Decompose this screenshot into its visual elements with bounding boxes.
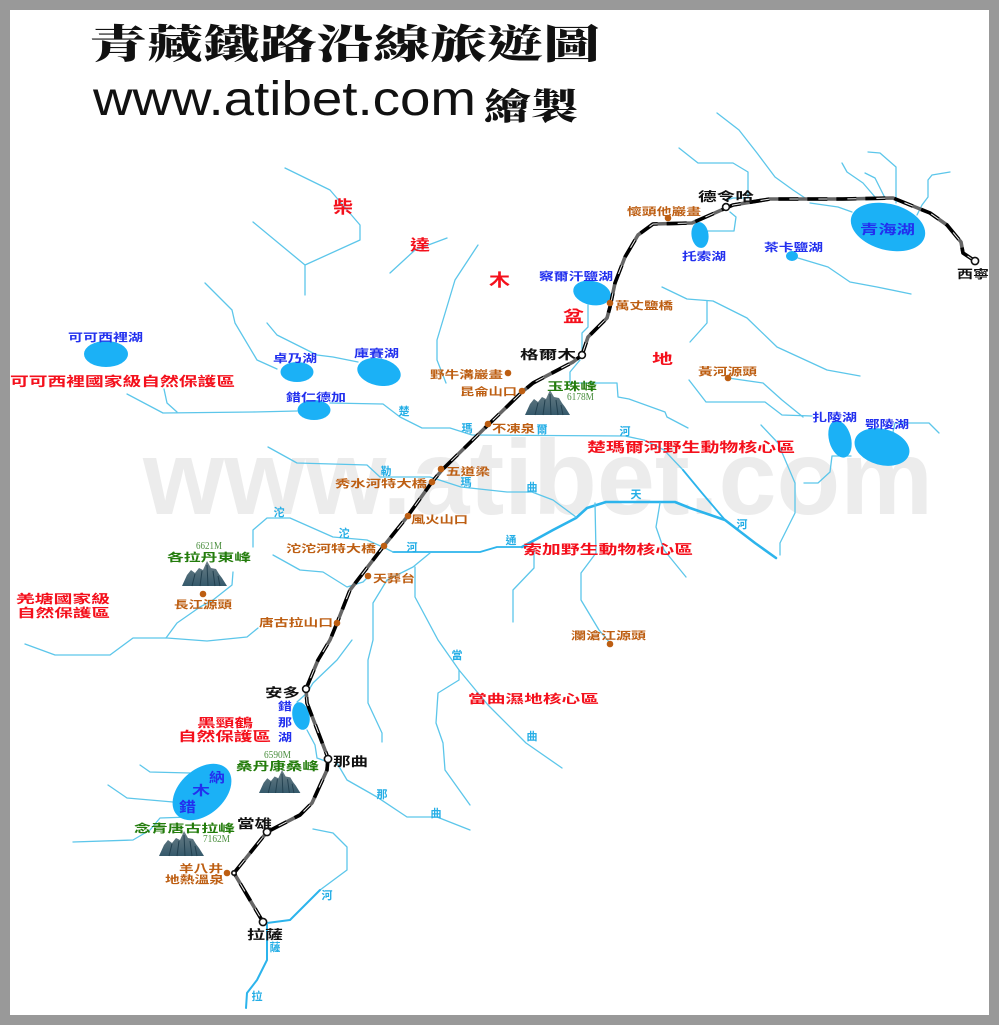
label: Cuona Lake: 錯 [278, 699, 292, 713]
river name labels: 瑪 [460, 476, 472, 489]
river name labels: 沱 [338, 526, 350, 540]
poi: Tanggula Pass [259, 616, 340, 629]
river name labels: 瑪 [462, 422, 472, 435]
railway line [234, 198, 975, 922]
river name labels: 曲 [526, 729, 538, 743]
station: Lhasa: 拉薩 [247, 927, 283, 942]
poi: Yangbajing hot springs: 地熱溫泉 [165, 873, 225, 886]
label: Black-necked crane reserve: 自然保護區 [178, 729, 271, 744]
poi: Tanggula Pass: 唐古拉山口 [259, 616, 333, 629]
label: Cuoren Dejia: 錯仁德加 [286, 390, 346, 404]
poi: Kunlun Pass [460, 385, 525, 398]
poi: Tuotuo River bridge [286, 542, 387, 555]
label: Black-necked crane reserve [178, 715, 271, 744]
lakes [84, 195, 931, 831]
poi: Lancang River source: 瀾滄江源頭 [571, 629, 647, 642]
label: Qinghai Lake: 青海湖 [860, 222, 915, 237]
poi: Yeniugou rock paintings [430, 368, 511, 381]
river name labels: 沱 [274, 505, 284, 519]
river name labels: 拉 [252, 989, 262, 1003]
river name labels: 河 [736, 518, 748, 531]
label: Tuosu Lake: 托索湖 [682, 249, 726, 263]
lake: Tuosu [690, 221, 710, 249]
lake: Qarhan [571, 277, 613, 309]
river name labels: 曲 [430, 806, 442, 820]
poi: Yangtze source [174, 591, 233, 611]
poi: Sky burial platform: 天葬台 [373, 572, 415, 585]
poi: Huaitoutala rock paintings [627, 205, 702, 221]
label: Cuona Lake: 那 [278, 716, 292, 729]
river name labels: 薩 [270, 941, 280, 954]
station labels [237, 189, 989, 942]
icon: mountain Sedankangsang [259, 770, 300, 793]
lake: Chaka [786, 251, 798, 261]
label: Yuzhu Peak: 玉珠峰 [547, 379, 597, 393]
river name labels: 河 [620, 425, 630, 438]
station: Nagqu: 那曲 [333, 755, 368, 769]
river name labels: 那 [376, 788, 388, 801]
lake: Cuoren Dejia [298, 400, 330, 420]
river name labels: 爾 [536, 423, 548, 436]
label: Namtso [179, 770, 225, 815]
label: Namtso: 錯 [179, 799, 196, 815]
river name labels: 河 [406, 541, 418, 554]
label: Qaidam basin: 柴 [333, 198, 353, 217]
station: Golmud: 格爾木 [520, 347, 577, 362]
station markers [232, 204, 979, 926]
label: Hoh Xil reserve: 可可西裡國家級自然保護區 [10, 374, 235, 389]
lake labels [68, 222, 915, 815]
peak labels [134, 379, 597, 845]
label: Sedankangsang Peak [236, 750, 320, 773]
poi: Budongquan [485, 421, 536, 435]
icon: mountain Nyenchen Tanglha [159, 831, 204, 856]
poi: Xiushui River bridge [335, 477, 435, 490]
poi: Xiushui River bridge: 秀水河特大橋 [335, 477, 428, 490]
station: Damxung: 當雄 [237, 816, 272, 831]
label: Suojia core zone: 索加野生動物核心區 [523, 542, 693, 557]
website credit [92, 73, 578, 127]
icon: mountain Geladaindong [182, 561, 227, 586]
label: Nyenchen Tanglha Peak [134, 821, 235, 845]
poi: Wanzhang salt bridge: 萬丈鹽橋 [615, 299, 674, 312]
river name labels: 當 [452, 649, 462, 662]
label: Nyenchen Tanglha Peak: 念青唐古拉峰 [134, 821, 235, 835]
poi: Yellow River source [698, 365, 758, 381]
label: Qaidam basin: 地 [652, 351, 673, 367]
label: Qaidam basin: 木 [489, 271, 510, 290]
label: Qaidam basin [333, 198, 673, 367]
label: Cuona Lake [278, 699, 292, 744]
website credit: 繪製 [484, 87, 578, 127]
label: Black-necked crane reserve: 黑頸鶴 [197, 715, 253, 730]
label: Namtso: 木 [192, 783, 210, 798]
poi: Yangtze source: 長江源頭 [174, 598, 233, 611]
lake: Zhuonai [280, 362, 314, 382]
label: Qarhan Salt Lake: 察爾汗鹽湖 [539, 269, 613, 283]
poi: Tuotuo River bridge: 沱沱河特大橋 [286, 542, 377, 555]
poi: Lancang River source [571, 629, 647, 647]
title: 青藏鐵路沿線旅遊圖 [90, 22, 600, 67]
poi: Fenghuo Pass [405, 513, 468, 526]
label: Geladaindong Peak: 6621M [196, 541, 222, 552]
label: Sedankangsang Peak: 桑丹康桑峰 [236, 759, 320, 773]
attraction labels [165, 205, 758, 886]
label: Qaidam basin: 盆 [563, 308, 584, 326]
lake: Kusai [355, 354, 403, 390]
poi: Huaitoutala rock paintings: 懷頭他巖畫 [627, 205, 702, 218]
poi: Yeniugou rock paintings: 野牛溝巖畫 [430, 368, 504, 381]
label: Chaka Salt Lake: 茶卡鹽湖 [764, 240, 823, 254]
station: Xining: 西寧 [957, 267, 989, 281]
label: Dangqu wetland core zone: 當曲濕地核心區 [468, 691, 599, 706]
poi: Wudaoliang [438, 465, 491, 478]
poi: Yangbajing hot springs: 羊八井 [179, 862, 223, 875]
label: Geladaindong Peak: 各拉丹東峰 [167, 550, 251, 564]
lake: Hoh Xil [84, 341, 128, 367]
website credit: www.atibet.com [92, 73, 476, 126]
label: Nyenchen Tanglha Peak: 7162M [203, 834, 230, 845]
label: Zhaling Lake: 扎陵湖 [812, 410, 857, 424]
icon: mountain Yuzhu [525, 390, 570, 415]
river name labels: 天 [630, 488, 642, 501]
lake: Qinghai [845, 195, 931, 259]
label: Changtang reserve [16, 591, 110, 620]
label: Qaidam basin: 達 [410, 237, 430, 254]
poi: Fenghuo Pass: 風火山口 [411, 513, 468, 526]
label: Hoh Xil Lake: 可可西裡湖 [68, 330, 143, 344]
label: Geladaindong Peak [167, 541, 251, 564]
label: Chumar River core zone: 楚瑪爾河野生動物核心區 [587, 439, 795, 455]
river name labels: 河 [322, 889, 332, 902]
label: Eling Lake: 鄂陵湖 [865, 417, 909, 431]
label: Sedankangsang Peak: 6590M [264, 750, 291, 761]
label: Namtso: 納 [209, 770, 225, 785]
label: Changtang reserve: 自然保護區 [17, 605, 110, 620]
label: Yuzhu Peak [547, 379, 597, 403]
label: Zhuonai Lake: 卓乃湖 [273, 351, 317, 365]
lake: Namtso [162, 753, 242, 831]
river name labels: 勒 [380, 464, 392, 478]
poi: Sky burial platform [365, 572, 415, 585]
river name labels: 楚 [398, 404, 410, 418]
poi: Budongquan: 不凍泉 [492, 422, 536, 435]
poi: Wanzhang salt bridge [607, 299, 674, 312]
watermark: www.atibet.com [142, 419, 933, 537]
poi: Wudaoliang: 五道梁 [446, 465, 491, 478]
label: Yuzhu Peak: 6178M [567, 392, 594, 403]
river name labels: 曲 [526, 480, 538, 494]
poi: Yellow River source: 黃河源頭 [698, 365, 758, 378]
label: Cuona Lake: 湖 [278, 730, 292, 744]
lake: Eling [850, 422, 914, 472]
lake: Zhaling [824, 418, 856, 460]
basin and reserve labels [10, 198, 795, 744]
poi: Yangbajing hot springs [165, 862, 230, 886]
river name labels [252, 404, 748, 1003]
river name labels: 通 [506, 533, 516, 547]
station: Amdo: 安多 [265, 685, 300, 700]
station: Delingha: 德令哈 [698, 189, 755, 204]
label: Kusai Lake: 庫賽湖 [354, 346, 399, 360]
poi: Kunlun Pass: 昆侖山口 [460, 385, 517, 398]
lake: Cuona [290, 701, 312, 731]
label: Changtang reserve: 羌塘國家級 [16, 591, 110, 606]
